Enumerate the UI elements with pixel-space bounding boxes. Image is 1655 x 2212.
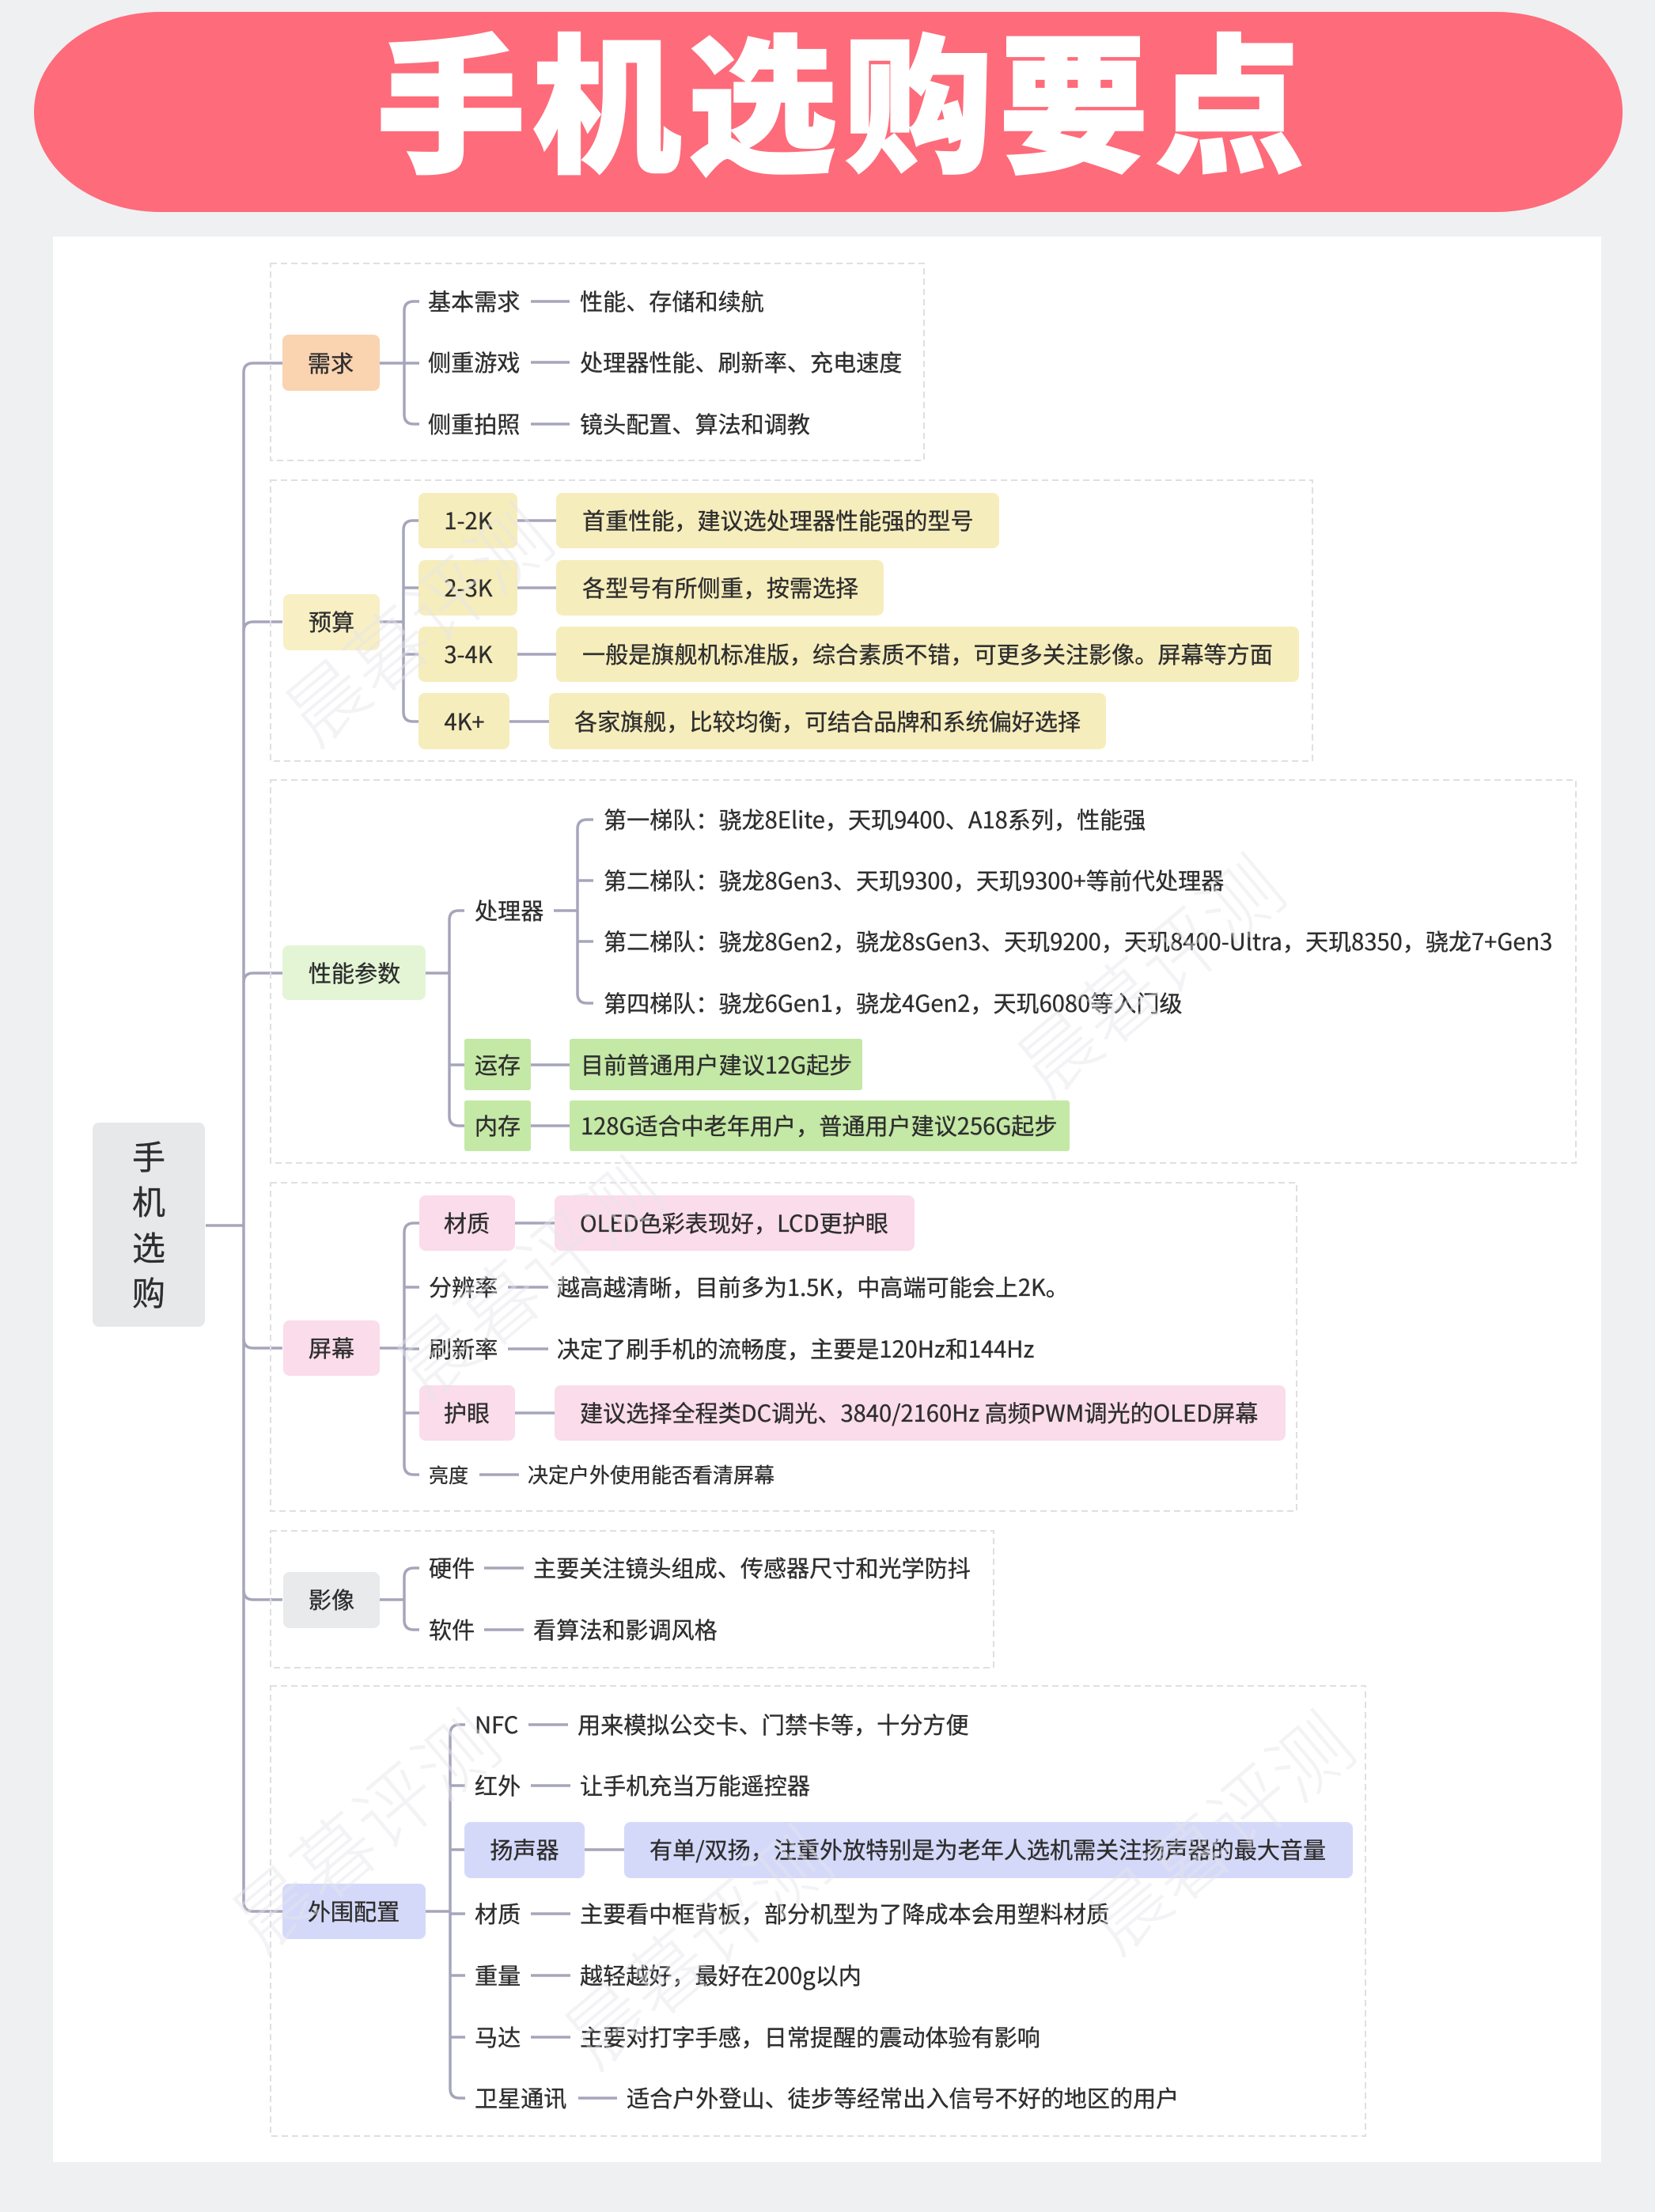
watermarks: 晨暮评测 bbox=[203, 1682, 520, 1973]
item: 2-3K bbox=[418, 560, 884, 615]
item: 基本需求: 基本需求 bbox=[428, 284, 520, 317]
item: 3-4K: 3-4K bbox=[444, 637, 493, 670]
item: 运存: 目前普通用户建议12G起步 bbox=[581, 1047, 852, 1081]
item: 4K+: 4K+ bbox=[444, 704, 485, 737]
item: 侧重游戏 bbox=[428, 345, 902, 378]
item: 材质: 材质 bbox=[475, 1896, 521, 1930]
root node bbox=[93, 1123, 205, 1327]
item: 马达: 马达 bbox=[475, 2020, 521, 2053]
item: 1-2K: 首重性能，建议选处理器性能强的型号 bbox=[582, 503, 974, 536]
node: 预算 bbox=[283, 594, 380, 650]
item: 3-4K bbox=[418, 627, 1299, 682]
item: 护眼: 护眼 bbox=[444, 1396, 490, 1429]
panel: 影像 bbox=[271, 1531, 994, 1668]
root node: 手 bbox=[132, 1131, 165, 1180]
item: 扬声器: 扬声器 bbox=[490, 1832, 559, 1865]
node: 影像: 影像 bbox=[309, 1582, 354, 1615]
item: 4K+: 各家旗舰，比较均衡，可结合品牌和系统偏好选择 bbox=[574, 704, 1081, 737]
item: 基本需求 bbox=[428, 284, 764, 317]
item: 分辨率: 分辨率 bbox=[429, 1270, 498, 1303]
watermarks: 晨暮评测 bbox=[988, 827, 1305, 1118]
panel: 预算 bbox=[271, 480, 1312, 761]
item: 运存 bbox=[464, 1039, 862, 1090]
root node: 机 bbox=[132, 1176, 165, 1225]
watermarks: 晨暮评测 bbox=[256, 475, 573, 767]
item: 分辨率: 越高越清晰，目前多为1.5K，中高端可能会上2K。 bbox=[557, 1270, 1069, 1303]
item: 马达: 主要对打字手感，日常提醒的震动体验有影响 bbox=[580, 2020, 1040, 2053]
node: 需求: 需求 bbox=[308, 346, 354, 379]
panel: 性能参数 bbox=[271, 780, 1576, 1163]
item: 材质 bbox=[419, 1195, 915, 1251]
item: 亮度: 亮度 bbox=[429, 1460, 468, 1489]
item: 软件 bbox=[429, 1612, 718, 1646]
node: 外围配置 bbox=[282, 1884, 426, 1939]
item: 材质: OLED色彩表现好，LCD更护眼 bbox=[580, 1206, 888, 1239]
panel: 屏幕 bbox=[271, 1183, 1297, 1511]
item: 基本需求: 性能、存储和续航 bbox=[580, 284, 764, 317]
item: 软件: 看算法和影调风格 bbox=[533, 1612, 718, 1646]
item: 红外 bbox=[475, 1768, 810, 1801]
node: 影像 bbox=[283, 1572, 380, 1628]
node: 预算: 预算 bbox=[309, 604, 354, 638]
item: 侧重游戏: 侧重游戏 bbox=[428, 345, 520, 378]
item: 运存: 运存 bbox=[475, 1047, 521, 1081]
panel: 外围配置 bbox=[271, 1686, 1365, 2136]
item: 护眼: 建议选择全程类DC调光、3840/2160Hz 高频PWM调光的OLED屏幕 bbox=[580, 1396, 1258, 1429]
item: 2-3K: 2-3K bbox=[444, 570, 493, 604]
item: 亮度: 决定户外使用能否看清屏幕 bbox=[528, 1460, 774, 1489]
item: 材质: 材质 bbox=[444, 1206, 490, 1239]
item: 护眼 bbox=[419, 1385, 1286, 1441]
node: 屏幕: 屏幕 bbox=[309, 1331, 354, 1364]
main connector spine bbox=[206, 363, 282, 1911]
item: 扬声器: 有单/双扬，注重外放特别是为老年人选机需关注扬声器的最大音量 bbox=[650, 1832, 1326, 1865]
node: 性能参数: 性能参数 bbox=[309, 956, 400, 989]
title banner bbox=[34, 0, 1623, 212]
item: 处理器 bbox=[475, 802, 1552, 1019]
item: 1-2K: 1-2K bbox=[444, 503, 493, 536]
item: 侧重游戏: 处理器性能、刷新率、充电速度 bbox=[580, 345, 902, 378]
panel: 需求 bbox=[271, 263, 924, 460]
item: 软件: 软件 bbox=[429, 1612, 475, 1646]
node: 需求 bbox=[282, 335, 380, 391]
root node: 购 bbox=[132, 1267, 165, 1316]
item: 处理器: 第四梯队：骁龙6Gen1，骁龙4Gen2，天玑6080等入门级 bbox=[604, 986, 1183, 1019]
root node: 选 bbox=[132, 1222, 165, 1271]
item: NFC: 用来模拟公交卡、门禁卡等，十分方便 bbox=[578, 1707, 969, 1740]
item: 扬声器 bbox=[464, 1822, 1353, 1878]
watermarks: 晨暮评测 bbox=[1058, 1684, 1374, 1975]
item: 刷新率: 刷新率 bbox=[429, 1331, 498, 1365]
item: 重量: 越轻越好，最好在200g以内 bbox=[580, 1958, 862, 1991]
item: NFC: NFC bbox=[475, 1707, 518, 1740]
node: 性能参数 bbox=[282, 945, 426, 1000]
item: 处理器: 第二梯队：骁龙8Gen2，骁龙8sGen3、天玑9200，天玑8400-Ultra，天玑8350，骁龙7+Gen3 bbox=[604, 924, 1552, 957]
item: 刷新率: 决定了刷手机的流畅度，主要是120Hz和144Hz bbox=[557, 1331, 1034, 1365]
item: 重量: 重量 bbox=[475, 1958, 521, 1991]
item: 卫星通讯: 卫星通讯 bbox=[475, 2081, 566, 2114]
item: 红外: 红外 bbox=[475, 1768, 521, 1801]
node: 外围配置: 外围配置 bbox=[308, 1894, 400, 1927]
item: 侧重拍照: 侧重拍照 bbox=[428, 407, 520, 440]
item: 3-4K: 一般是旗舰机标准版，综合素质不错，可更多关注影像。屏幕等方面 bbox=[582, 637, 1273, 670]
item: 内存: 128G适合中老年用户，普通用户建议256G起步 bbox=[581, 1108, 1057, 1142]
item: 侧重拍照: 镜头配置、算法和调教 bbox=[580, 407, 810, 440]
item: 内存: 内存 bbox=[475, 1108, 521, 1142]
item: 处理器: 第一梯队：骁龙8Elite，天玑9400、A18系列，性能强 bbox=[604, 802, 1146, 835]
watermarks bbox=[203, 475, 1374, 2089]
item: 卫星通讯: 适合户外登山、徒步等经常出入信号不好的地区的用户 bbox=[627, 2081, 1179, 2114]
item: 2-3K: 各型号有所侧重，按需选择 bbox=[582, 570, 858, 604]
item: 1-2K bbox=[418, 493, 999, 548]
watermarks: 晨暮评测 bbox=[536, 1798, 852, 2089]
item: 4K+ bbox=[418, 693, 1106, 749]
item: 处理器: 处理器 bbox=[475, 893, 543, 926]
watermarks: 晨暮评测 bbox=[367, 1130, 684, 1421]
item: 材质: 主要看中框背板，部分机型为了降成本会用塑料材质 bbox=[580, 1896, 1109, 1930]
item: 硬件: 主要关注镜头组成、传感器尺寸和光学防抖 bbox=[533, 1551, 971, 1584]
item: 内存 bbox=[464, 1100, 1070, 1151]
item: 红外: 让手机充当万能遥控器 bbox=[580, 1768, 810, 1801]
node: 屏幕 bbox=[283, 1320, 380, 1376]
item: 硬件: 硬件 bbox=[429, 1551, 475, 1584]
item: 侧重拍照 bbox=[428, 407, 810, 440]
item: 处理器: 第二梯队：骁龙8Gen3、天玑9300，天玑9300+等前代处理器 bbox=[604, 863, 1224, 896]
